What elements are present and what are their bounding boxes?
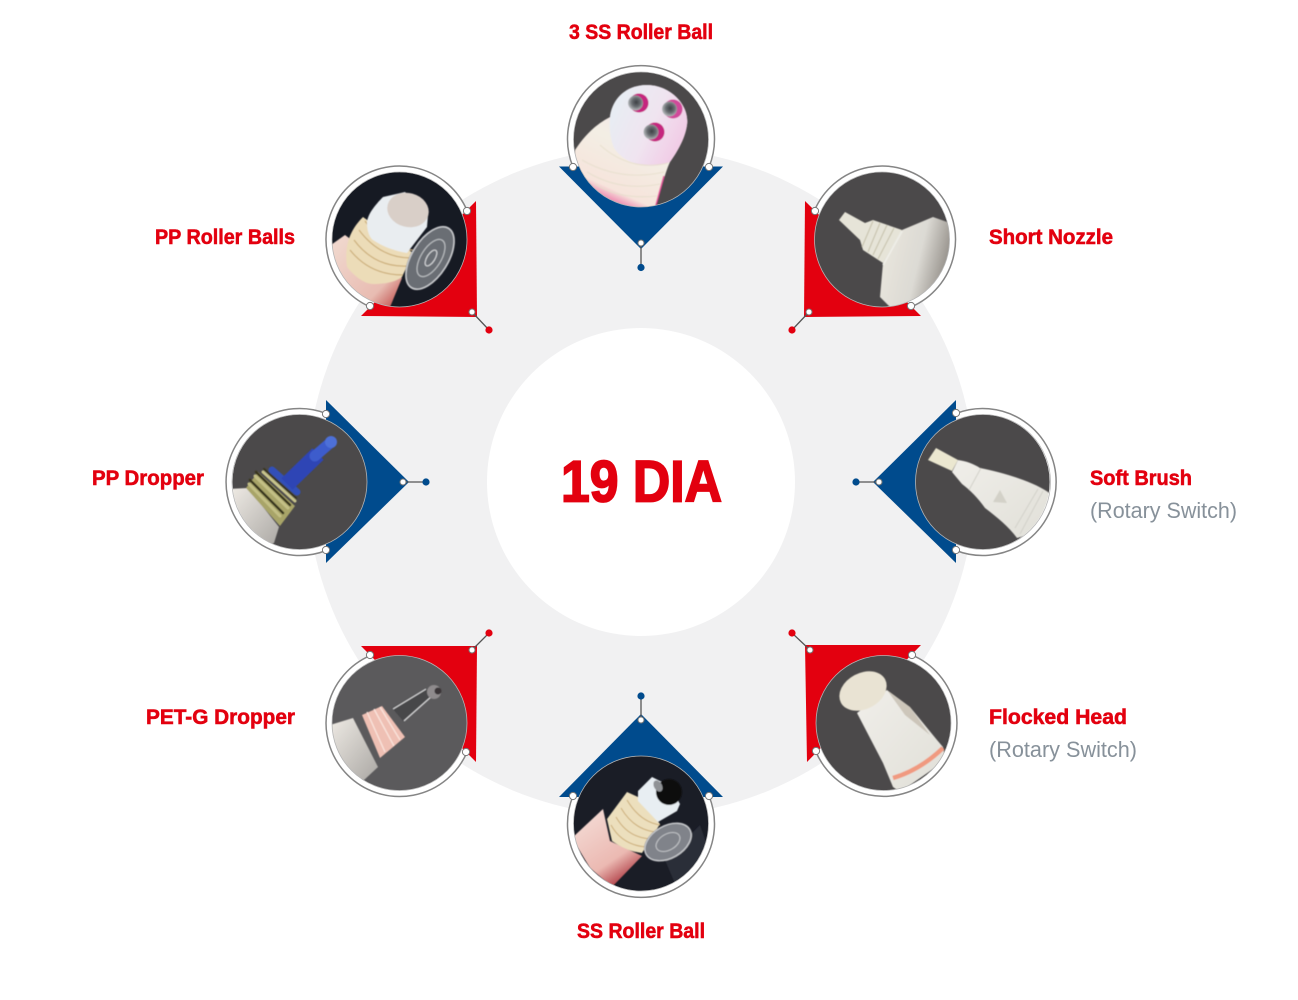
label: Soft Brush (Rotary Switch): Soft Brush (1090, 467, 1192, 490)
panel: Soft Brush (852, 400, 1237, 563)
outer arc with nodes (226, 409, 406, 556)
pointer triangle (326, 400, 409, 563)
photo: PET-G glass dropper (328, 656, 467, 790)
connector and dot (852, 478, 879, 486)
panel: Flocked Head (788, 629, 1137, 796)
outer arc with nodes (326, 166, 475, 315)
panel: PET-G Dropper (146, 629, 493, 796)
panel: SS Roller Ball (559, 692, 723, 943)
pointer triangle (559, 166, 723, 249)
photo: SS roller ball tube (572, 756, 712, 895)
panel: Short Nozzle (788, 166, 1113, 334)
photo: soft brush applicator (916, 414, 1052, 550)
pointer triangle (559, 714, 723, 797)
connector and dot (472, 629, 493, 650)
outer arc with nodes (876, 408, 1056, 556)
panel: PP Dropper (92, 400, 430, 563)
connector and dot (788, 312, 809, 334)
pointer triangle (361, 646, 477, 762)
photo: blue dropper nozzle (228, 414, 367, 550)
photo: short nozzle tube (814, 172, 955, 310)
label: SS Roller Ball: SS Roller Ball (577, 920, 705, 943)
label: Soft Brush (Rotary Switch) (1090, 467, 1237, 523)
panel: 3 SS Roller Ball (559, 21, 723, 271)
photo: three ball roller head (574, 72, 708, 212)
panel: PP Roller Balls (155, 166, 493, 334)
label: Flocked Head (Rotary Switch) (989, 706, 1137, 762)
connector and dot (472, 312, 493, 334)
pointer triangle (873, 400, 956, 563)
photo: PP roller tube with clear disc (328, 172, 467, 312)
label: Short Nozzle: Short Nozzle (989, 226, 1113, 249)
photo: flocked head applicator (816, 656, 951, 792)
label: Flocked Head (Rotary Switch): Flocked Head (989, 706, 1127, 729)
label: Flocked Head (Rotary Switch): (Rotary Switch) (989, 737, 1137, 762)
outer arc with nodes (807, 647, 957, 796)
pointer triangle (361, 201, 477, 317)
background ring (307, 148, 975, 816)
outer arc with nodes (568, 717, 714, 897)
pointer triangle (804, 201, 921, 317)
pointer triangle (805, 645, 921, 762)
outer arc with nodes (806, 166, 956, 315)
connector and dot (788, 629, 810, 650)
connector and dot (403, 478, 430, 486)
outer arc with nodes (326, 647, 475, 796)
connector and dot (637, 692, 645, 720)
label: PET-G Dropper: PET-G Dropper (146, 706, 295, 729)
label: Soft Brush (Rotary Switch): (Rotary Switch) (1090, 498, 1237, 523)
outer arc with nodes (568, 66, 714, 246)
connector and dot (637, 243, 645, 271)
label: 3 SS Roller Ball: 3 SS Roller Ball (569, 21, 713, 44)
center title: 19 DIA (561, 450, 722, 514)
label: PP Roller Balls: PP Roller Balls (155, 226, 295, 249)
label: PP Dropper: PP Dropper (92, 467, 204, 490)
